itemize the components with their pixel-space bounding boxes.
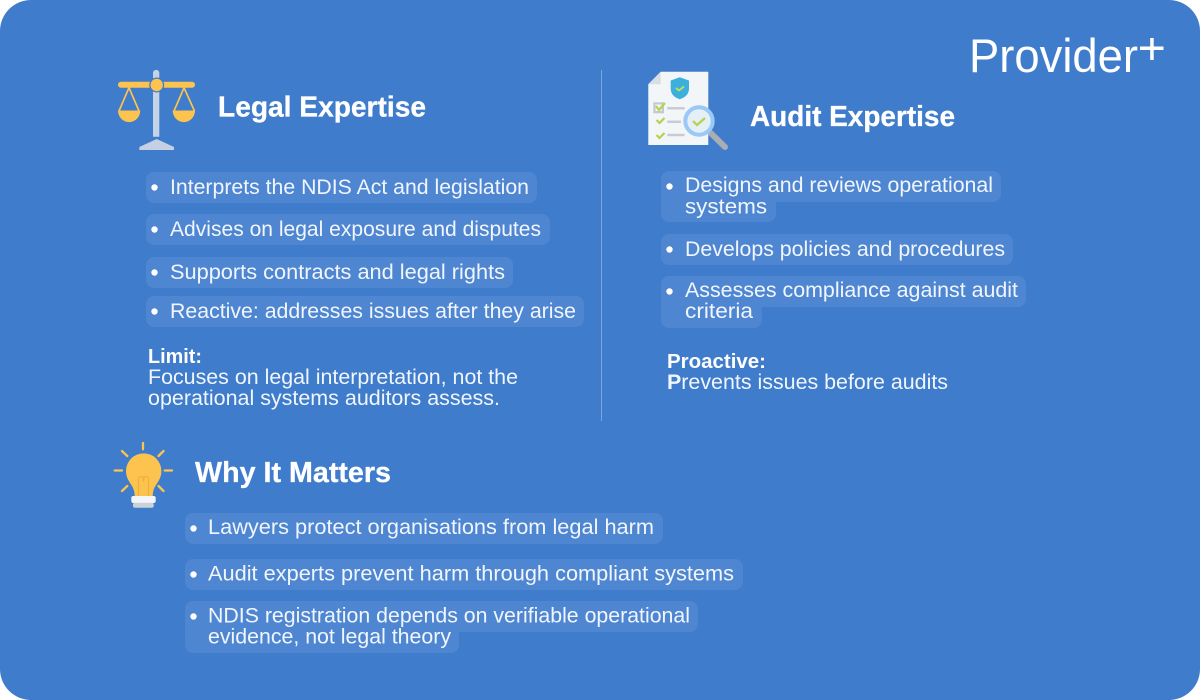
bullet: supports: Supports contracts and legal rights [170, 260, 505, 284]
bullet: supports [146, 257, 513, 288]
text block: limit [148, 345, 518, 410]
icon: scales of justice [118, 70, 195, 150]
bullet: registration: NDIS registration depends on verifiable operational [208, 604, 690, 628]
icon: audit document with magnifier [648, 72, 725, 147]
bullet: designs: systems [685, 194, 767, 218]
heading: Audit Expertise: Audit Expertise [750, 101, 955, 133]
bullet: assesses: criteria [685, 299, 753, 323]
bullet: lawyers: Lawyers protect organisations from legal harm [208, 515, 654, 539]
panel: audit expertise [648, 72, 1026, 394]
text block: limit: Limit: [148, 345, 202, 368]
text block: proactive: Proactive: [667, 350, 766, 373]
text block: limit: Focuses on legal interpretation, not the [148, 365, 518, 389]
panel: why it matters [115, 443, 743, 653]
logo: Provider+: Provider [969, 29, 1138, 82]
bullet: designs [661, 171, 1001, 222]
text block: proactive [667, 350, 948, 394]
text block: limit: operational systems auditors assess. [148, 386, 500, 410]
bullet: interprets: Interprets the NDIS Act and legislation [170, 175, 529, 199]
divider [601, 70, 602, 421]
panel: legal expertise [118, 70, 584, 410]
bullet: advises: Advises on legal exposure and disputes [170, 217, 541, 241]
heading: Why It Matters: Why It Matters [195, 457, 391, 489]
text block: proactive: Prevents issues before audits [667, 370, 948, 394]
bullet: reactive: Reactive: addresses issues after they arise [170, 299, 576, 323]
icon: light bulb [115, 443, 172, 508]
heading: Legal Expertise: Legal Expertise [218, 92, 426, 124]
bullet: assesses: Assesses compliance against audit [685, 278, 1018, 302]
bullet: policies: Develops policies and procedures [685, 237, 1005, 261]
bullet: assesses [661, 276, 1026, 328]
bullet: audit experts: Audit experts prevent harm through compliant systems [208, 562, 734, 586]
bullet: designs: Designs and reviews operational [685, 173, 993, 197]
bullet: registration [185, 601, 698, 653]
bullet: registration: evidence, not legal theory [208, 624, 451, 648]
